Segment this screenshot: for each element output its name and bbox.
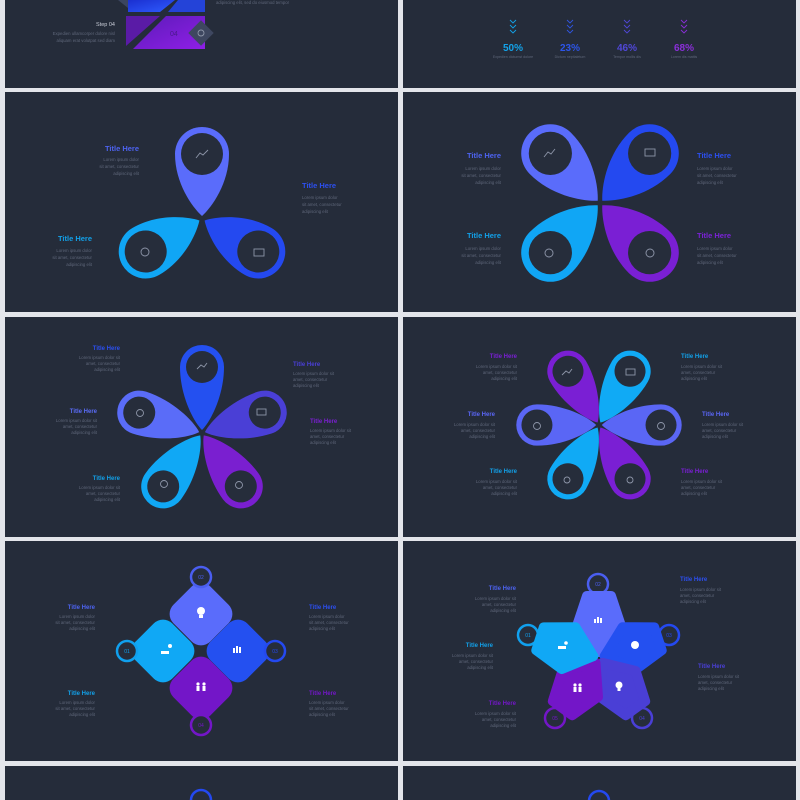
slide: row 4 right (cropped) (403, 766, 796, 800)
texts: adipiscing elit (490, 723, 517, 728)
col 3: 46% (617, 43, 637, 54)
texts: Lorem ipsum dolor sit (475, 596, 517, 601)
texts: Lorem ipsum dolor (309, 700, 345, 705)
text left bottom: adipiscing elit (66, 262, 93, 267)
step 04 text (53, 22, 115, 43)
texts: adipiscing elit (309, 712, 336, 717)
texts: adipiscing elit (681, 491, 708, 496)
text right: Lorem ipsum dolor (302, 195, 338, 200)
texts: Lorem ipsum dolor sit (476, 364, 518, 369)
col 1: 50% (503, 43, 523, 54)
texts: Title Here (680, 577, 708, 583)
texts: amet, consectetur (86, 491, 121, 496)
texts: adipiscing elit (491, 491, 518, 496)
step 04 text: Step 04 (96, 22, 115, 28)
texts: Title Here (681, 469, 709, 475)
text right: Title Here (302, 181, 336, 190)
pin BL (509, 185, 618, 294)
number rings: 03 (666, 633, 672, 639)
texts: sit amet, consectetur (309, 620, 349, 625)
petals (533, 596, 665, 721)
texts: amet, consectetur (681, 485, 716, 490)
texts (56, 346, 352, 502)
texts (454, 354, 744, 496)
text left top (99, 144, 140, 176)
slide: three pins (row 1 left) (5, 92, 398, 312)
texts: adipiscing elit (680, 599, 707, 604)
texts: amet, consectetur (702, 428, 737, 433)
col 1 (493, 20, 533, 59)
texts: adipiscing elit (71, 430, 98, 435)
texts: sit amet, consectetur (55, 706, 96, 711)
texts: amet, consectetur (459, 659, 494, 664)
col 2: 23% (560, 43, 580, 54)
texts: adipiscing elit (69, 712, 96, 717)
texts: adipiscing elit (309, 626, 336, 631)
texts (461, 151, 737, 265)
texts: Lorem ipsum dolor sit (680, 587, 722, 592)
texts: Lorem ipsum dolor (697, 246, 733, 251)
slide: five pins (row 2 left) (5, 317, 398, 537)
texts (452, 577, 740, 728)
white icons (161, 607, 241, 691)
texts (55, 605, 349, 717)
texts: adipiscing elit (698, 686, 725, 691)
texts: sit amet, consectetur (309, 706, 349, 711)
texts: Title Here (68, 605, 96, 611)
text left top: adipiscing elit (113, 171, 140, 176)
texts: adipiscing elit (469, 434, 496, 439)
texts: Title Here (702, 412, 730, 418)
texts: Lorem ipsum dolor sit (79, 485, 121, 490)
number rings: 04 (198, 723, 204, 729)
texts: amet, consectetur (482, 602, 517, 607)
text left bottom: Title Here (58, 234, 92, 243)
texts: Title Here (489, 586, 517, 592)
texts: sit amet, consectetur (55, 620, 96, 625)
white icons (558, 617, 639, 692)
texts: Lorem ipsum dolor (309, 614, 345, 619)
texts: Title Here (309, 691, 337, 697)
texts: sit amet, consectetur (461, 173, 502, 178)
texts: amet, consectetur (310, 434, 345, 439)
texts: amet, consectetur (681, 370, 716, 375)
top text: adipiscing elit, sed do eiusmod tempor (216, 0, 290, 5)
icons (544, 149, 655, 257)
texts: Title Here (489, 701, 517, 707)
number rings: 02 (198, 575, 204, 581)
texts: Lorem ipsum dolor (465, 166, 502, 171)
texts: adipiscing elit (697, 180, 724, 185)
number rings: 01 (525, 633, 531, 639)
slide: step diagram (row 0 left) (5, 0, 398, 88)
col 4: Lorem dis mattis (671, 55, 697, 59)
slide: pentagon star (row 3 right) (403, 541, 796, 761)
icon diamond (188, 20, 214, 46)
text right (302, 181, 342, 214)
texts: adipiscing elit (702, 434, 729, 439)
text left top: sit amet, consectetur (99, 164, 140, 169)
texts: adipiscing elit (681, 376, 708, 381)
icons (141, 150, 264, 256)
diamonds (126, 577, 275, 725)
texts: Title Here (309, 605, 337, 611)
texts: adipiscing elit (94, 367, 121, 372)
texts: amet, consectetur (63, 424, 98, 429)
col 2 (555, 20, 585, 59)
pin left (109, 197, 213, 288)
pin TL (509, 112, 618, 221)
texts: Title Here (68, 691, 96, 697)
texts: Title Here (310, 419, 338, 425)
slide: row 4 left (cropped) (5, 766, 398, 800)
texts: Title Here (698, 664, 726, 670)
texts: Lorem ipsum dolor sit (310, 428, 352, 433)
texts: Lorem ipsum dolor sit (702, 422, 744, 427)
texts: Lorem ipsum dolor (59, 614, 96, 619)
text left top: Title Here (105, 144, 139, 153)
col 4 (671, 20, 697, 59)
texts: amet, consectetur (483, 485, 518, 490)
col 3 (613, 20, 641, 59)
texts: Lorem ipsum dolor sit (454, 422, 496, 427)
texts: Title Here (490, 469, 518, 475)
texts: adipiscing elit (475, 180, 502, 185)
slide: four pins (row 1 right) (403, 92, 796, 312)
texts: Title Here (697, 231, 731, 240)
texts: Lorem ipsum dolor sit (681, 364, 723, 369)
texts: Title Here (490, 354, 518, 360)
texts: Lorem ipsum dolor sit (475, 711, 517, 716)
texts: Title Here (467, 151, 501, 160)
texts: adipiscing elit (310, 440, 337, 445)
pins (180, 345, 224, 430)
number rings: 01 (124, 649, 130, 655)
step 04 text: Expedien ullamcorper dolore nisl (53, 31, 115, 36)
icons (534, 369, 664, 483)
texts: Title Here (466, 643, 494, 649)
texts: amet, consectetur (483, 370, 518, 375)
texts: Lorem ipsum dolor sit (681, 479, 723, 484)
text left bottom: sit amet, consectetur (52, 255, 93, 260)
texts: amet, consectetur (680, 593, 715, 598)
slide: six pins (row 2 right) (403, 317, 796, 537)
step 04 text: aliquam erat volutpat sed diam (56, 38, 115, 43)
col 3: Tempor mollis dis (613, 55, 641, 59)
texts: Lorem ipsum dolor sit (452, 653, 494, 658)
texts: adipiscing elit (94, 497, 121, 502)
texts: Lorem ipsum dolor sit (293, 371, 335, 376)
texts: Lorem ipsum dolor sit (56, 418, 98, 423)
number rings (117, 567, 285, 735)
number rings: 02 (595, 582, 601, 588)
number rings (518, 574, 679, 728)
texts: Title Here (681, 354, 709, 360)
texts: Lorem ipsum dolor sit (698, 674, 740, 679)
texts: adipiscing elit (490, 608, 517, 613)
texts: Title Here (93, 346, 121, 352)
texts: Lorem ipsum dolor sit (476, 479, 518, 484)
texts: adipiscing elit (293, 383, 320, 388)
texts: Title Here (70, 409, 98, 415)
number rings: 05 (552, 716, 558, 722)
texts: sit amet, consectetur (697, 173, 737, 178)
texts: amet, consectetur (698, 680, 733, 685)
texts: Title Here (93, 476, 121, 482)
texts: Title Here (468, 412, 496, 418)
slide: diamond cross (row 3 left) (5, 541, 398, 761)
texts: adipiscing elit (69, 626, 96, 631)
number rings: 04 (639, 716, 645, 722)
texts: adipiscing elit (697, 260, 724, 265)
texts: adipiscing elit (491, 376, 518, 381)
pin BR (582, 185, 691, 294)
texts: sit amet, consectetur (697, 253, 737, 258)
texts: Title Here (467, 231, 501, 240)
texts: adipiscing elit (475, 260, 502, 265)
step 04 purple block: 04 (170, 31, 178, 38)
texts: Lorem ipsum dolor (465, 246, 502, 251)
slide: percentages (row 0 right) (403, 0, 796, 88)
blue step shapes (118, 0, 205, 12)
pin right (191, 197, 295, 288)
pin top (175, 127, 229, 216)
texts: Lorem ipsum dolor sit (79, 355, 121, 360)
texts: Lorem ipsum dolor (59, 700, 96, 705)
text left bottom: Lorem ipsum dolor (56, 248, 93, 253)
texts: adipiscing elit (467, 665, 494, 670)
text right: adipiscing elit (302, 209, 329, 214)
pin TR (582, 112, 691, 221)
text right: sit amet, consectetur (302, 202, 342, 207)
text left top: Lorem ipsum dolor (103, 157, 140, 162)
text left bottom (52, 234, 93, 267)
texts: amet, consectetur (461, 428, 496, 433)
col 4: 68% (674, 43, 694, 54)
number rings: 03 (272, 649, 278, 655)
texts: amet, consectetur (86, 361, 121, 366)
col 1: Expedien dictumst dolore (493, 55, 533, 59)
icons (136, 363, 266, 488)
texts: Title Here (697, 151, 731, 160)
texts: Lorem ipsum dolor (697, 166, 733, 171)
texts: Title Here (293, 362, 321, 368)
col 2: Dictum neptialetum (555, 55, 585, 59)
texts: sit amet, consectetur (461, 253, 502, 258)
step 04 purple block (126, 16, 205, 49)
texts: amet, consectetur (482, 717, 517, 722)
texts: amet, consectetur (293, 377, 328, 382)
